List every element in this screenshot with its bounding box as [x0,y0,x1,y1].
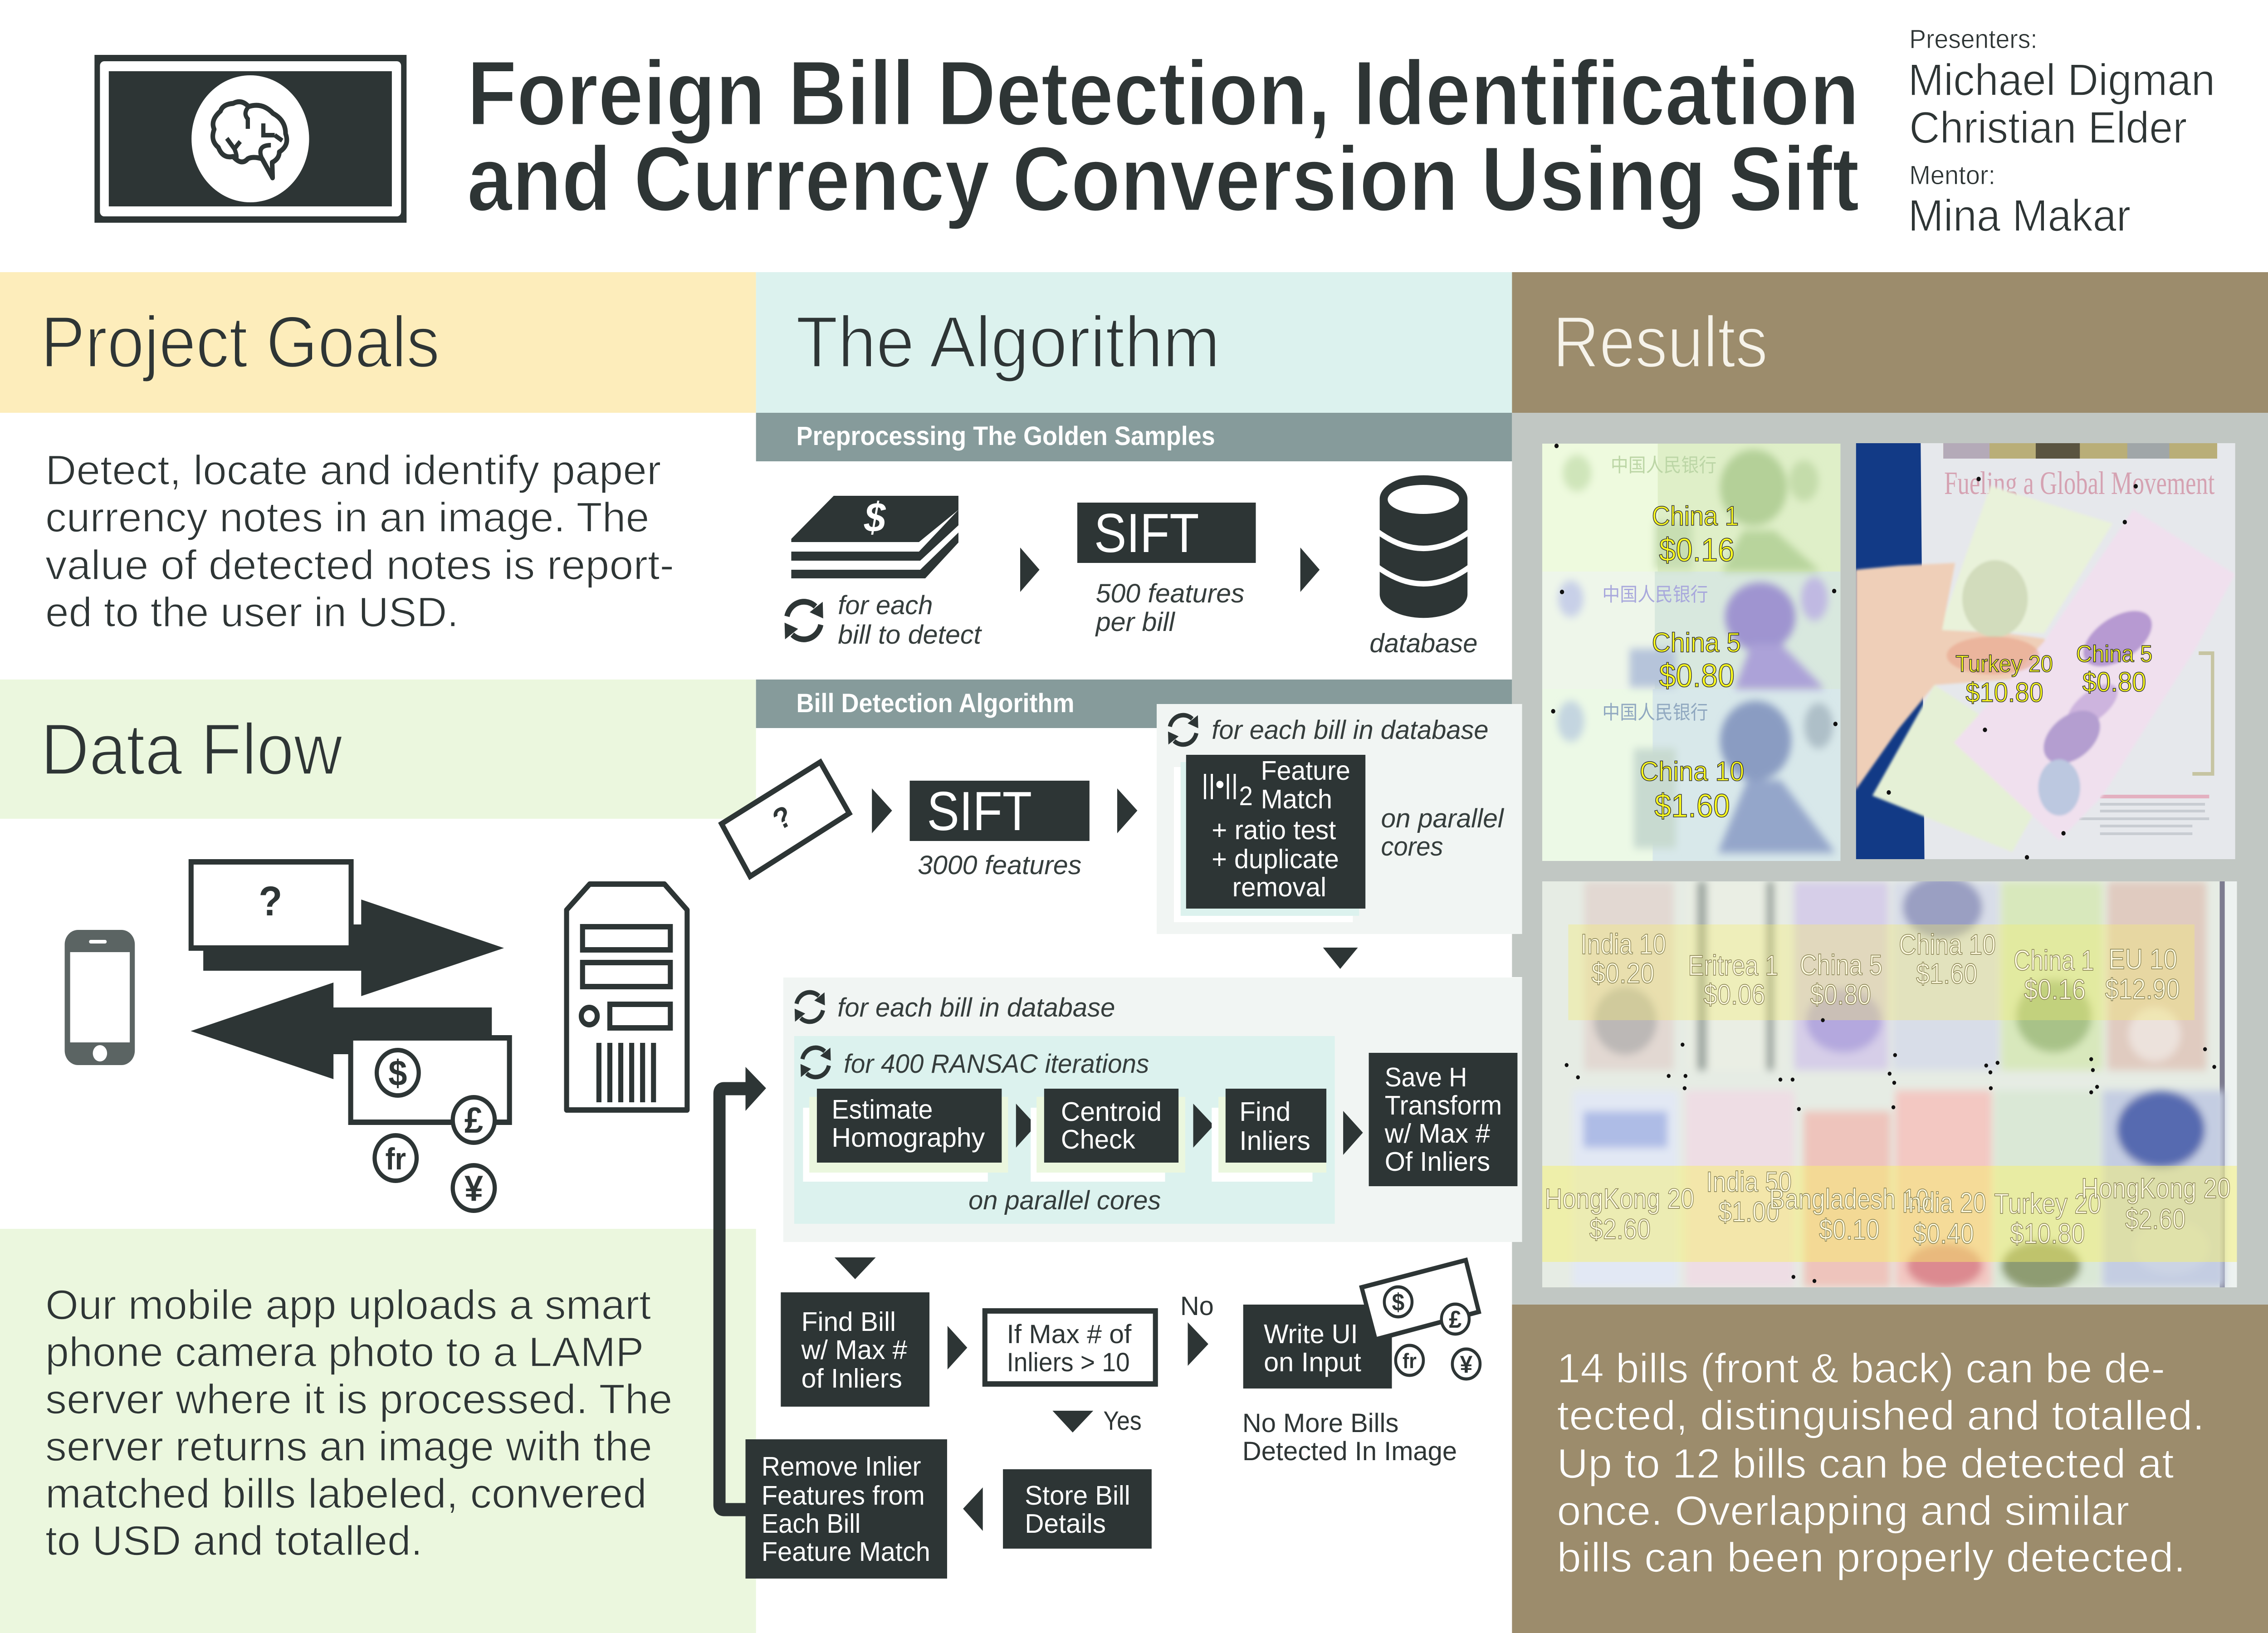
box: save H transform: w/ Max # [1384,1119,1491,1149]
text: data flow description: to USD and totalled. [45,1517,422,1564]
presenters and mentor: Michael Digman [1908,56,2215,105]
labels: twelve bills: $2.60 [1589,1213,1651,1245]
box: save H transform: Of Inliers [1385,1147,1490,1177]
icon: stack of bills [791,494,958,578]
text: data flow description: server where it is processed. The [45,1376,672,1423]
labels: twelve bills: EU 10 [2108,943,2177,975]
box: store bill details: Store Bill [1025,1481,1130,1511]
box: inliers decision: If Max # of [1007,1319,1132,1349]
arrow: left [963,1487,983,1531]
labels: hand bills: $0.80 [2082,667,2146,697]
panel: project goals: ed to the user in USD. [45,589,459,636]
box: remove inlier features: Each Bill [762,1509,860,1539]
labels: twelve bills: Bangladesh 10 [1769,1183,1929,1215]
icon: stack of bills: $ [864,494,886,541]
text: 500 features per bill: per bill [1095,607,1175,636]
presenters and mentor [1908,24,2215,241]
text: no: No [1180,1291,1214,1320]
title: and Currency Conversion Using Sift [467,128,1859,230]
labels: chinese bills: China 10 [1640,757,1744,787]
icon: unknown bill [191,862,351,948]
icon: loop [785,602,823,639]
labels: hand bills: China 5 [2076,640,2152,667]
box: save H transform: Save H [1385,1063,1467,1092]
labels: twelve bills: $0.40 [1913,1217,1974,1249]
panel: algorithm header [756,272,1512,413]
text: 500 features per bill: 500 features [1096,578,1245,608]
icon: tilted bill with coins [1362,1260,1480,1379]
box: estimate homography [817,1089,1002,1163]
box: estimate homography: Estimate [831,1095,933,1125]
arrow [1193,1104,1214,1148]
icon: smartphone [65,930,135,1065]
labels: twelve bills: $2.60 [2125,1203,2186,1235]
box: find inliers: Inliers [1239,1126,1310,1156]
labels: twelve bills: $0.16 [2024,973,2086,1005]
icon: bill with currency coins: ¥ [464,1168,483,1209]
labels: twelve bills: Eritrea 1 [1688,949,1778,981]
labels: twelve bills: $1.60 [1916,958,1977,989]
panel: results summary: Up to 12 bills can be detected at [1557,1440,2174,1487]
box: find inliers [1226,1089,1326,1163]
icon: bill with currency coins: $ [388,1053,407,1094]
text: for each bill to detect: for each [838,590,933,620]
presenters and mentor: Mina Makar [1908,191,2131,241]
text: for each bill to detect [838,590,982,649]
labels: twelve bills: $12.90 [2105,973,2180,1005]
box: write UI [1243,1305,1392,1389]
labels: chinese bills [1640,501,1744,824]
box: remove inlier features: Feature Match [762,1537,930,1567]
labels: chinese bills: $0.80 [1659,657,1735,694]
labels: twelve bills: India 50 [1706,1166,1792,1198]
text: database: database [1369,628,1477,658]
box: feature match: ||•|| [1202,770,1238,799]
box: inliers decision: Inliers > 10 [1007,1347,1130,1377]
labels: twelve bills: China 1 [2014,944,2094,976]
box: feature match: 2 [1239,782,1253,811]
labels: twelve bills: $0.10 [1819,1213,1880,1245]
arrow: down [835,1257,876,1279]
box: remove inlier features: Remove Inlier [762,1452,921,1481]
photo: chinese bills: 中国人民银行 [1602,584,1708,605]
box: centroid check: Check [1061,1125,1135,1154]
title [467,42,1859,230]
panel: results summary: 14 bills (front & back) can be de- [1557,1345,2165,1392]
labels: chinese bills: $0.16 [1659,532,1735,568]
box: save H transform [1369,1053,1517,1186]
photo: hand holding bills [1856,443,2235,859]
arrow: upload to server [203,900,504,996]
text: no more bills detected: Detected In Image [1242,1436,1457,1466]
arrow [1188,1322,1208,1366]
text: 500 features per bill [1095,578,1245,636]
box: estimate homography: Homography [831,1123,985,1153]
text: on parallel cores: on parallel [1381,803,1504,833]
box: feature match: Feature [1261,756,1350,786]
labels: chinese bills: China 5 [1652,628,1741,658]
arrow [948,1326,967,1369]
labels: twelve bills: India 10 [1580,928,1666,960]
panel: project goals: Project Goals [41,301,440,382]
panel: results summary: bills can been properly detected. [1557,1534,2186,1581]
text: for each bill in database: for each bill in database [837,993,1115,1022]
panel: algorithm header: The Algorithm [796,301,1220,382]
labels: hand bills [1955,640,2152,708]
panel: project goals: value of detected notes is report- [45,542,674,588]
box: inliers decision [985,1311,1155,1384]
icon: loop [801,1048,831,1077]
box: SIFT 3000: SIFT [927,780,1032,842]
subheading: bill detection [756,680,1512,728]
labels: twelve bills [1545,928,2231,1249]
panel: project goals: Detect, locate and identify paper [45,447,661,494]
icon: tilted bill with coins: ¥ [1460,1351,1472,1378]
panel: data flow background [0,680,756,1633]
arrow: down yes [1052,1411,1093,1433]
text: data flow description: matched bills labeled, convered [45,1470,647,1517]
text: data flow description: Our mobile app uploads a smart [45,1281,651,1328]
text: on parallel cores: cores [1381,831,1443,861]
panel: results image background [1512,413,2268,1305]
arrow: loop back to top [719,1067,766,1510]
arrow [1300,548,1320,592]
labels: twelve bills: India 20 [1902,1187,1986,1218]
box: SIFT 500 [1077,502,1256,564]
icon: loop [1168,715,1198,744]
arrow [1343,1111,1363,1155]
box: remove inlier features: Features from [762,1481,925,1511]
presenters and mentor: Presenters: [1909,24,2038,54]
panel: results header: Results [1553,301,1768,382]
panel: results summary: tected, distinguished and totalled. [1557,1392,2204,1439]
subheading: bill detection: Bill Detection Algorithm [797,688,1075,718]
box: store bill details: Details [1025,1509,1106,1539]
box: write UI: Write UI [1264,1320,1358,1349]
box: SIFT 3000 [910,780,1090,842]
labels: hand bills: Turkey 20 [1955,650,2053,677]
box: find bill [781,1292,929,1407]
arrow [1020,548,1040,592]
arrow [872,788,892,833]
box: write UI: on Input [1264,1348,1361,1377]
heading: data flow: Data Flow [41,709,342,790]
panel: results header [1512,272,2268,413]
box: store bill details [1003,1469,1152,1549]
text: no more bills detected [1242,1408,1457,1466]
icon: tilted bill with coins: fr [1403,1350,1417,1373]
icon: bill with currency coins: £ [464,1100,483,1141]
labels: twelve bills: China 5 [1800,949,1882,981]
subheading: preprocessing: Preprocessing The Golden Samples [797,421,1215,450]
box: feature match: removal [1232,873,1326,902]
arrow: response to phone [191,983,492,1079]
arrow [1016,1104,1036,1148]
logo: bill with brain [94,55,406,223]
arrow: down [1323,948,1358,969]
icon: bill with currency coins [351,1038,509,1211]
box: find bill: Find Bill [802,1307,896,1337]
text: 400 RANSAC iterations: for 400 RANSAC iterations [844,1049,1149,1078]
text: for each bill to detect: bill to detect [838,620,982,649]
panel: feature match loop [1157,704,1522,934]
text: data flow description [45,1281,672,1564]
subheading: preprocessing [756,413,1512,461]
text: on parallel cores: on parallel cores [968,1185,1161,1215]
box: feature match: + duplicate [1212,845,1339,874]
icon: unknown bill: ? [259,878,282,924]
labels: twelve bills: $1.00 [1718,1196,1779,1227]
box: find inliers: Find [1239,1097,1290,1127]
labels: twelve bills: $0.20 [1591,957,1654,989]
photo: chinese bills [1542,444,1840,861]
box: SIFT 500: SIFT [1094,502,1199,564]
box: feature match [1186,755,1365,909]
title: Foreign Bill Detection, Identification [467,42,1859,145]
text: yes: Yes [1103,1406,1142,1435]
box: feature match: Match [1261,785,1332,814]
text: on parallel cores [1381,803,1504,861]
box: find bill: of Inliers [802,1364,902,1393]
icon: tilted bill with coins: $ [1392,1289,1404,1316]
icon: loop [795,993,825,1022]
panel: results summary: once. Overlapping and similar [1557,1487,2129,1534]
labels: twelve bills: $0.80 [1810,978,1871,1010]
labels: twelve bills: $10.80 [2010,1217,2085,1249]
labels: twelve bills: HongKong 20 [2081,1172,2231,1204]
panel: results summary [1512,1305,2268,1633]
icon: unknown tilted bill: ? [767,799,797,837]
box: feature match: + ratio test [1212,816,1336,845]
icon: server tower [567,884,687,1110]
box: centroid check [1044,1089,1178,1163]
icon: bill with currency coins: fr [385,1142,406,1176]
text: no more bills detected: No More Bills [1242,1408,1398,1437]
panel: project goals [0,272,756,680]
box: save H transform: Transform [1385,1091,1502,1120]
box: remove inlier features [746,1439,947,1579]
text: data flow description: server returns an image with the [45,1423,652,1470]
labels: twelve bills: $0.06 [1704,978,1765,1010]
box: find bill: w/ Max # [801,1335,907,1365]
labels: hand bills: $10.80 [1965,678,2043,708]
labels: twelve bills: HongKong 20 [1545,1183,1694,1214]
icon: database [1378,475,1470,618]
panel: homography loop [783,978,1522,1242]
box: centroid check: Centroid [1061,1097,1162,1127]
labels: twelve bills: China 10 [1899,929,1996,960]
panel: project goals: currency notes in an image. The [45,494,649,541]
icon: unknown tilted bill [722,762,849,876]
labels: chinese bills: China 1 [1652,501,1739,531]
text: for each bill in database: for each bill in database [1212,715,1488,744]
presenters and mentor: Christian Elder [1909,103,2187,153]
panel: RANSAC iterations [794,1036,1335,1224]
presenters and mentor: Mentor: [1909,160,1995,190]
arrow [1117,788,1137,833]
labels: twelve bills: Turkey 20 [1994,1188,2101,1219]
labels: chinese bills: $1.60 [1654,787,1730,824]
photo: twelve bills [1534,875,2237,1291]
photo: chinese bills: 中国人民银行 [1602,702,1708,723]
text: data flow description: phone camera photo to a LAMP [45,1329,644,1375]
photo: chinese bills: 中国人民银行 [1611,455,1716,476]
icon: tilted bill with coins: £ [1449,1306,1461,1333]
text: 3000 features: 3000 features [918,850,1081,880]
